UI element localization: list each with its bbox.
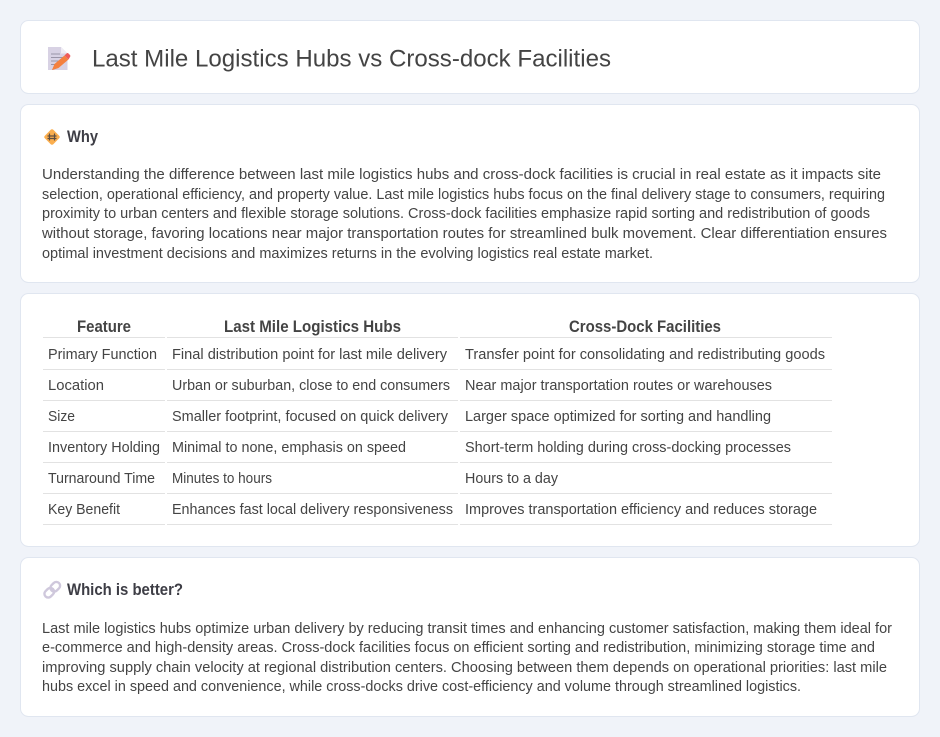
icon: link	[43, 580, 62, 599]
heading: why: Why	[67, 128, 99, 146]
row: inventory holding: Inventory Holding	[48, 440, 160, 456]
panel: which is better	[20, 558, 920, 716]
row: turnaround time	[48, 471, 559, 487]
text block: which is better	[42, 621, 892, 695]
row: size	[48, 409, 771, 425]
row: turnaround time: Turnaround Time	[48, 471, 155, 487]
text block: which is better: hubs excel in speed and convenience, while cross-docks drive cost-efficiency and volume through streamlined logistics.	[42, 679, 801, 695]
text block: why: without storage, favoring locations near major transportation routes for streamlined bulk movement. Clear differentiation ensures	[41, 226, 887, 242]
row: turnaround time: Minutes to hours	[172, 471, 272, 487]
text block: why: selection, operational efficiency, and property value. Last mile logistics hubs focus on the final delivery stage to consumers, requiring	[42, 187, 885, 203]
row: inventory holding: Minimal to none, emphasis on speed	[172, 440, 406, 456]
row: key benefit: Enhances fast local delivery responsiveness	[172, 502, 453, 518]
row: key benefit: Key Benefit	[48, 502, 120, 518]
row: inventory holding	[48, 440, 791, 456]
icon: memo with pencil	[48, 47, 70, 70]
row: primary function	[48, 347, 825, 363]
row: key benefit: Improves transportation efficiency and reduces storage	[465, 502, 817, 518]
table header: Last Mile Logistics Hubs	[224, 318, 401, 336]
text block: why: Understanding the difference between last mile logistics hubs and cross-dock facilities is crucial in real estate as it impacts site	[42, 167, 881, 183]
row: location: Near major transportation routes or warehouses	[465, 378, 772, 394]
row: primary function: Final distribution point for last mile delivery	[172, 347, 448, 363]
text block: which is better: Last mile logistics hubs optimize urban delivery by reducing transit times and enhancing customer satisfaction, making them ideal for	[42, 621, 892, 637]
panel: why	[20, 104, 920, 282]
table header: Cross-Dock Facilities	[569, 318, 721, 336]
heading: which is better: Which is better?	[67, 581, 183, 599]
row: size: Smaller footprint, focused on quick delivery	[172, 409, 449, 425]
icon: warning diamond	[44, 129, 60, 145]
row: primary function: Transfer point for consolidating and redistributing goods	[465, 347, 825, 363]
text block: why: proximity to urban centers and flexible storage solutions. Cross-dock facilities emphasize rapid sorting and redistribution of goods	[42, 206, 870, 222]
row: location: Location	[48, 378, 104, 394]
text block: why: optimal investment decisions and maximizes returns in the evolving logistics real estate market.	[42, 246, 653, 262]
panel: comparison table	[20, 294, 920, 546]
text block: which is better: improving supply chain velocity at regional distribution centers. Choosing between them depends on operational priorities: last mile	[42, 660, 887, 676]
title: Last Mile Logistics Hubs vs Cross-dock Facilities	[92, 46, 611, 72]
row: location: Urban or suburban, close to end consumers	[172, 378, 450, 394]
text block: which is better: e-commerce and high-density areas. Cross-dock facilities focus on efficient sorting and redistribution, minimizing storage time and	[42, 640, 875, 656]
table header	[77, 318, 721, 336]
row: primary function: Primary Function	[48, 347, 157, 363]
row: turnaround time: Hours to a day	[465, 471, 559, 487]
text block: why	[41, 167, 887, 262]
row: inventory holding: Short-term holding during cross-docking processes	[465, 440, 791, 456]
table header: Feature	[77, 318, 131, 336]
row: key benefit	[48, 502, 817, 518]
row: size: Larger space optimized for sorting and handling	[465, 409, 771, 425]
row: size: Size	[48, 409, 75, 425]
panel: header	[20, 20, 920, 94]
row: location	[48, 378, 772, 394]
